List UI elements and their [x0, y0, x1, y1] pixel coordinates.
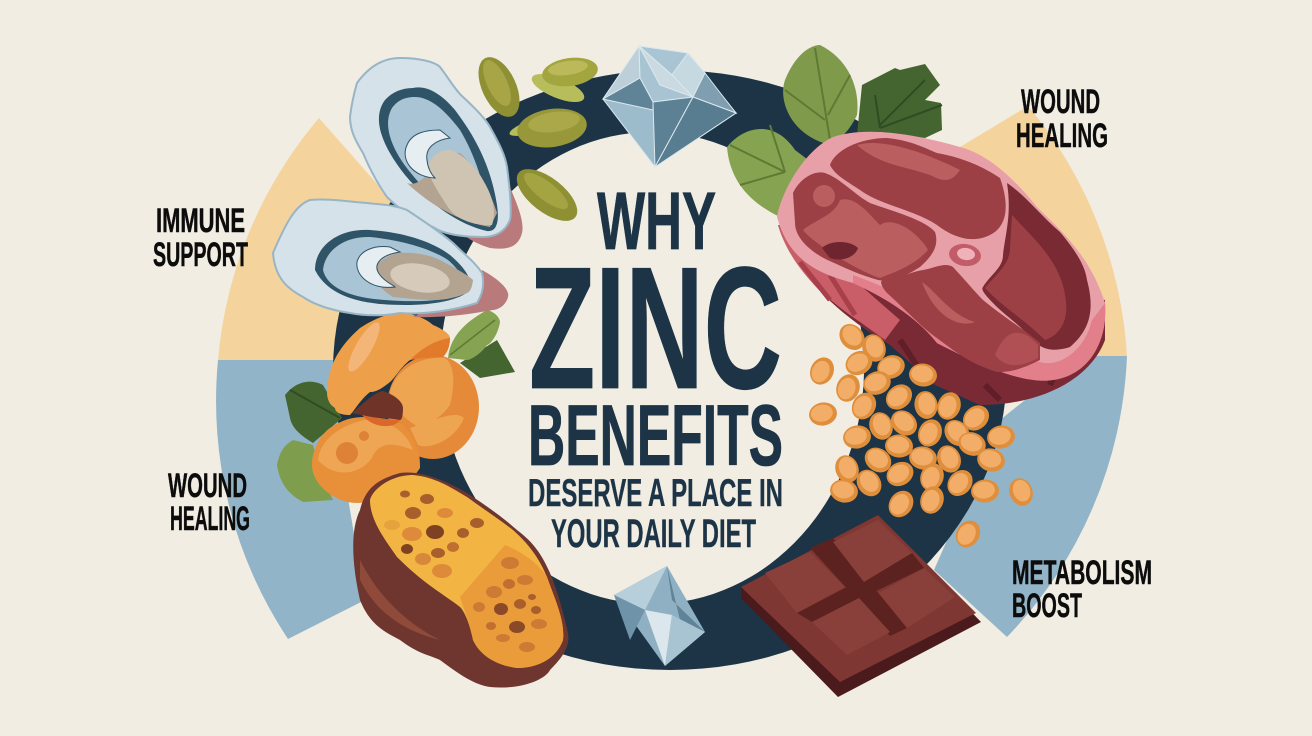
oyster shell [350, 58, 511, 237]
sweet potato flesh [370, 475, 563, 668]
oyster crescent [357, 247, 400, 287]
chocolate groove: upper left to lower right [810, 538, 907, 636]
label: immune support: SUPPORT [153, 236, 248, 274]
oyster meat [407, 153, 497, 227]
sweet potato spots [384, 490, 547, 652]
label: metabolism boost [1012, 554, 1152, 625]
oyster crescent [405, 130, 450, 178]
sector: top right tan [960, 106, 1127, 356]
steak side [778, 225, 1105, 405]
sweet potato skin [353, 472, 568, 688]
steak meat lobes [830, 138, 1006, 239]
title: why: WHY [597, 176, 716, 267]
apricot top lobe [327, 313, 450, 415]
icon: apricot leaves [277, 310, 515, 502]
label: immune support [153, 202, 248, 274]
apricot bottom lobe [312, 417, 420, 503]
steak centre bone [948, 242, 982, 268]
oyster mantle [379, 87, 498, 231]
title: zinc: ZINC [529, 230, 782, 425]
apricot right lobe [387, 355, 479, 459]
icon: lower oyster [273, 199, 508, 317]
chocolate squares [765, 552, 845, 613]
icon: soybeans [806, 319, 1037, 552]
label: wound healing right: HEALING [1016, 117, 1108, 155]
oyster tail [467, 182, 523, 249]
icon: top zinc crystal [603, 46, 736, 167]
icon: pumpkin seeds [470, 51, 600, 231]
label: wound healing left: HEALING [170, 500, 250, 538]
label: metabolism boost: BOOST [1012, 587, 1082, 625]
label: wound healing left: WOUND [168, 467, 247, 505]
label: metabolism boost: METABOLISM [1012, 554, 1152, 592]
label: wound healing right [1016, 83, 1108, 155]
label: wound healing right: WOUND [1021, 83, 1100, 121]
oyster mantle [315, 230, 470, 305]
chocolate groove: lower left to upper right [797, 553, 924, 622]
title block [528, 176, 783, 556]
label: immune support: IMMUNE [156, 202, 245, 240]
icon: dried apricots [312, 313, 479, 503]
icon: top leaves [727, 45, 942, 217]
icon: sweet potato [353, 472, 568, 688]
oyster meat [375, 253, 473, 300]
subtitle line two: YOUR DAILY DIET [551, 512, 756, 556]
icon: steak [777, 132, 1105, 405]
oyster shell [273, 199, 483, 315]
icon: upper oyster [350, 58, 523, 249]
steak fat rim [777, 132, 1105, 381]
apricot dark pit [352, 391, 403, 420]
label: wound healing left [168, 467, 250, 538]
title: benefits: BENEFITS [528, 388, 783, 484]
icon: chocolate bar [741, 515, 981, 697]
subtitle line one: DESERVE A PLACE IN [528, 472, 783, 515]
icon: bottom zinc crystal [614, 566, 705, 666]
oyster tail [413, 270, 508, 317]
central ring [333, 70, 1007, 670]
sector: top left tan [218, 118, 400, 360]
sector: bottom right blue [934, 356, 1127, 637]
sector: bottom left blue [216, 360, 365, 639]
